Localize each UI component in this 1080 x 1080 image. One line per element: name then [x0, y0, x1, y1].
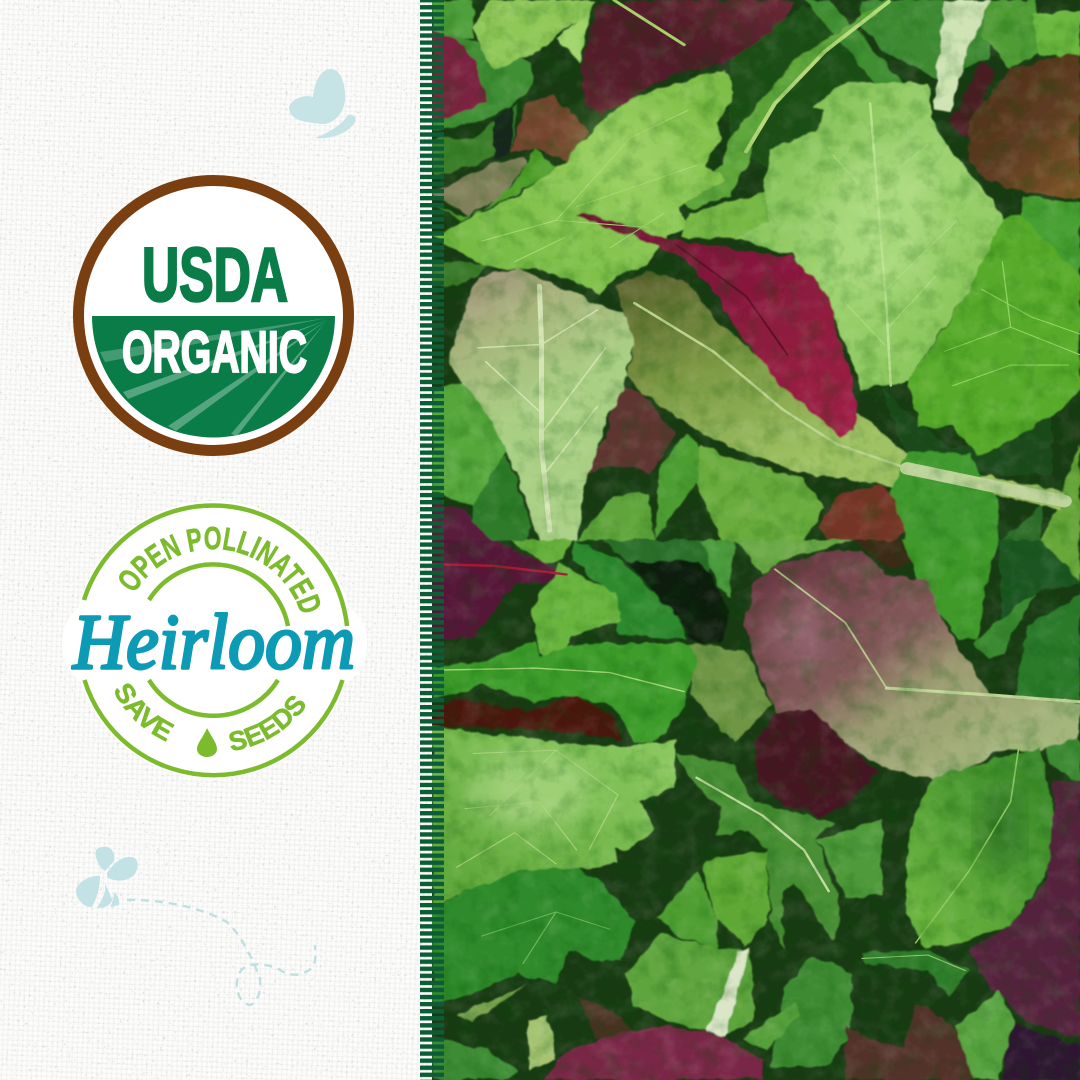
green rings	[84, 506, 347, 775]
white sticker backing	[62, 501, 367, 779]
leaves: lower half	[432, 540, 1080, 1080]
SAVE arc text: SAVE	[115, 683, 174, 742]
badge: Heirloom	[62, 501, 367, 779]
thin arugula	[680, 0, 889, 210]
icon: bee with dashed flight trail	[76, 847, 316, 1005]
bee body and wings	[76, 847, 138, 908]
USDA wordmark: USDA	[142, 233, 288, 318]
sun rays	[100, 318, 327, 436]
maroon and brown	[432, 31, 488, 122]
pale romaine	[449, 269, 637, 540]
frilly lettuce	[432, 69, 736, 296]
burgundy	[575, 212, 858, 436]
SEEDS arc text: SEEDS	[229, 696, 306, 750]
Heirloom script: Heirloom	[72, 598, 355, 685]
dashed flight trail	[127, 900, 316, 1005]
right lettuce	[907, 214, 1080, 455]
dandelion	[891, 451, 998, 540]
green half field	[92, 316, 335, 438]
stitched green stripe border	[420, 0, 444, 1080]
leaf texture	[432, 0, 1080, 1080]
ORGANIC wordmark: ORGANIC	[122, 320, 307, 385]
OPEN POLLINATED arc text: OPEN POLLINATED	[119, 526, 320, 612]
bronze romaine	[616, 272, 1064, 510]
panel: linen fabric background	[0, 0, 432, 1080]
leaves: upper half	[432, 0, 1080, 540]
mauve lettuce	[744, 550, 1080, 781]
badge: USDA Organic	[78, 180, 348, 450]
pale stem	[934, 0, 990, 110]
top light leaf	[473, 0, 597, 71]
icon: butterfly	[289, 69, 356, 138]
leaf veins	[432, 0, 1080, 970]
lower lettuces	[432, 726, 676, 909]
brown ring	[78, 180, 348, 450]
big lettuce	[680, 193, 771, 238]
panel: salad leaves photograph	[432, 0, 1080, 1080]
highlights and shadows on leaves	[470, 110, 1018, 870]
left green	[432, 382, 508, 506]
icon: seed drop	[197, 728, 217, 757]
